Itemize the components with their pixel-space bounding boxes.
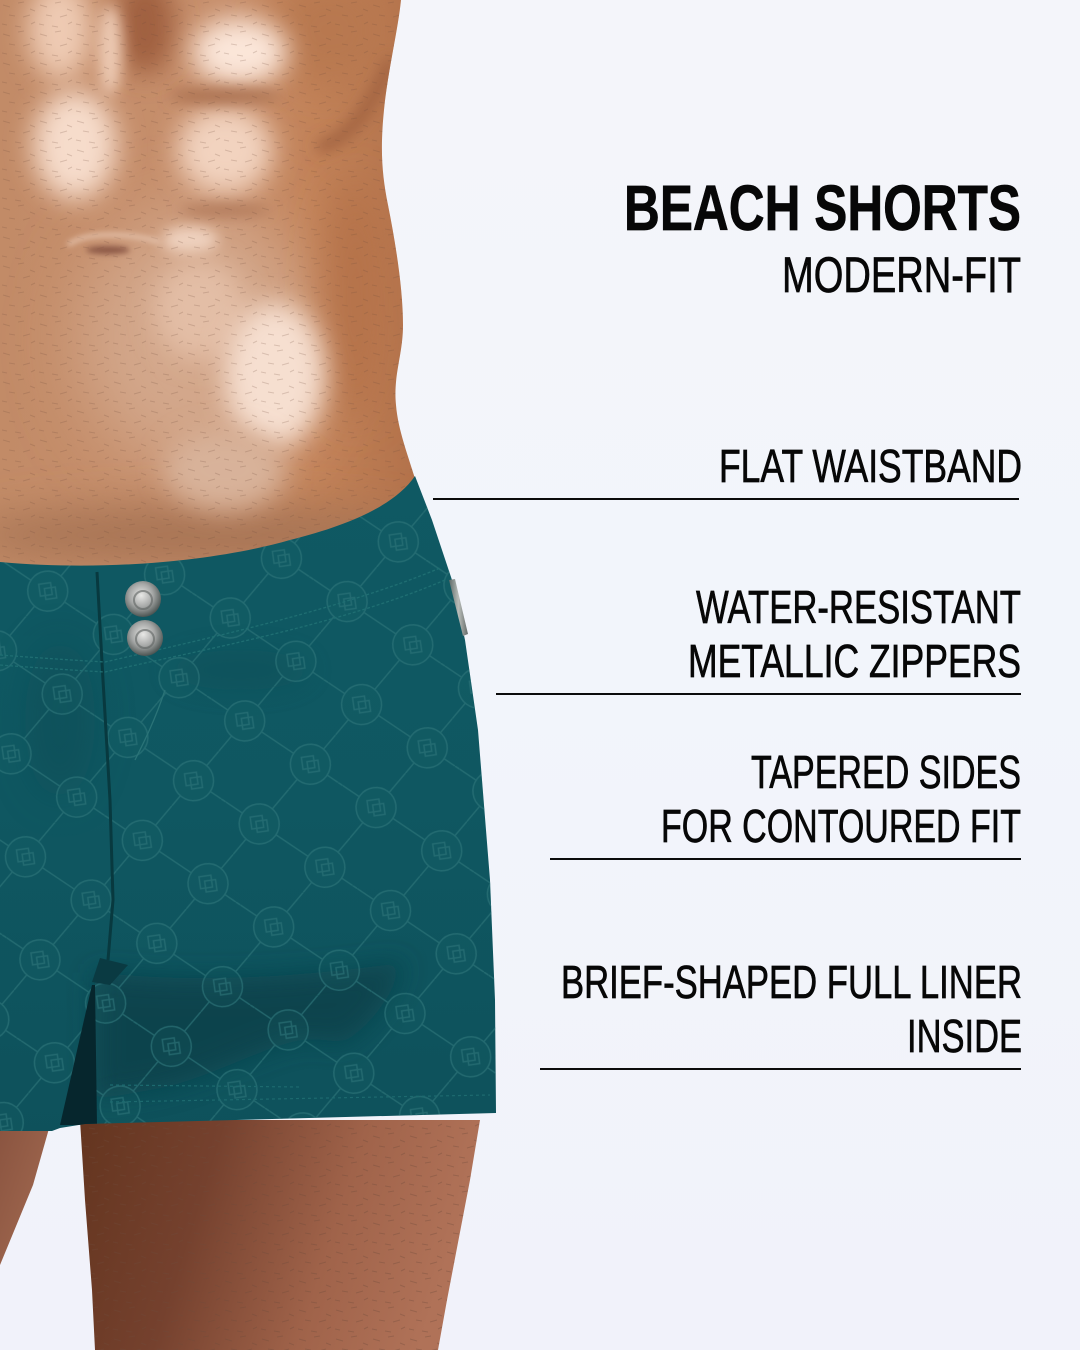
feature: full liner xyxy=(540,956,1022,1070)
fly placket xyxy=(97,572,113,960)
waistband stitching xyxy=(0,568,445,672)
pocket seam xyxy=(135,690,165,760)
shorts xyxy=(0,470,500,1140)
navel xyxy=(68,235,160,254)
torso xyxy=(0,0,414,566)
fold shading xyxy=(95,962,405,1100)
icon: metal snap buttons xyxy=(125,581,163,656)
left leg xyxy=(0,1125,50,1265)
abdominal creases xyxy=(170,88,280,104)
hem stitching xyxy=(110,1085,490,1102)
feature: full liner: INSIDE xyxy=(907,1010,1022,1062)
crotch shadow gap xyxy=(60,985,97,1125)
feature: metallic zippers xyxy=(496,581,1021,695)
icon: side zipper pull xyxy=(449,579,468,636)
photo: model torso wearing teal beach shorts xyxy=(0,0,500,1350)
right leg xyxy=(80,1120,480,1350)
feature: tapered sides xyxy=(550,746,1021,860)
